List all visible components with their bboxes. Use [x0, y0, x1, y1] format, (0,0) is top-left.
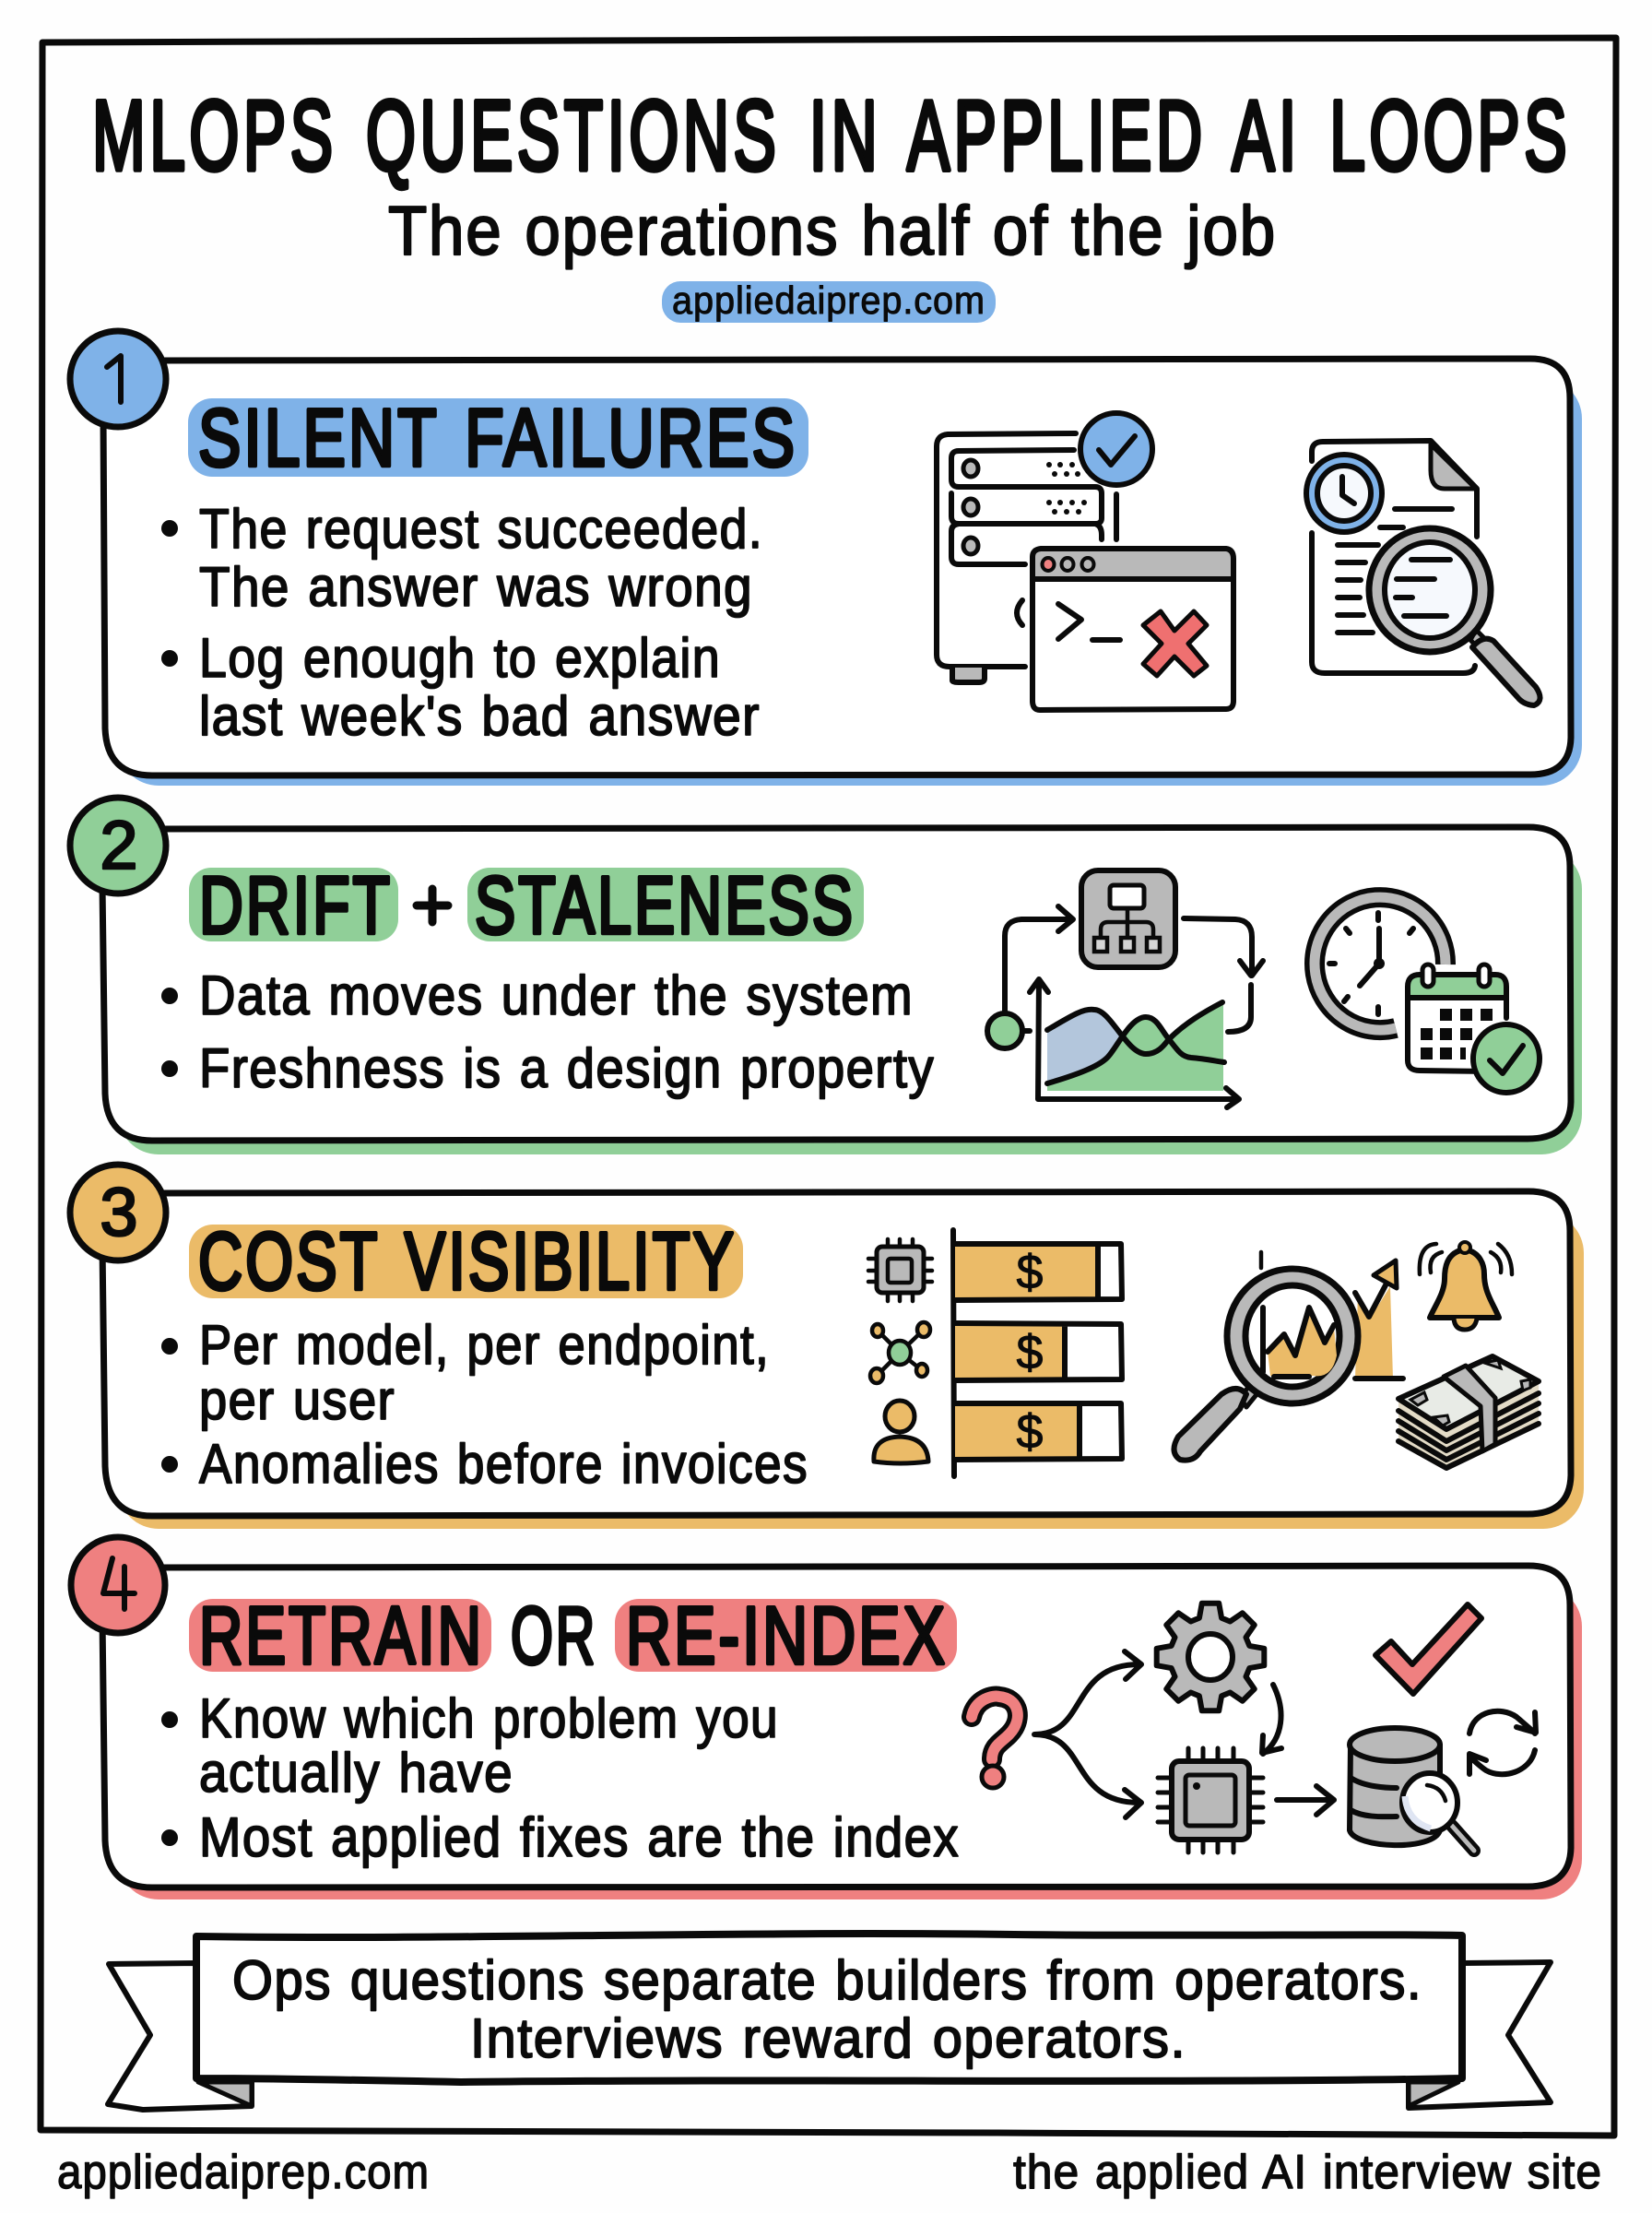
banner message — [232, 1949, 1422, 2069]
heading: STALENESS — [475, 859, 856, 951]
heading — [189, 859, 864, 951]
heading: OR — [511, 1590, 597, 1681]
icon: clock and calendar with check — [1315, 897, 1540, 1093]
bullet list — [161, 964, 935, 1099]
site pill: appliedaiprep.com — [672, 278, 985, 322]
heading: SILENT FAILURES — [198, 392, 797, 483]
bullet list — [161, 1687, 960, 1868]
panel: drift and staleness — [70, 798, 1582, 1154]
icon: per-entity cost bars: $ — [1017, 1246, 1044, 1299]
bullet list: Freshness is a design property — [199, 1037, 935, 1099]
number badge 4 — [71, 1537, 165, 1633]
number badge 3 — [70, 1165, 166, 1260]
footer right: tagline: the applied AI interview site — [1013, 2146, 1602, 2199]
icon: per-entity cost bars: $ — [1017, 1326, 1044, 1379]
banner message: Ops questions separate builders from operators. — [232, 1949, 1422, 2011]
bullet list: Anomalies before invoices — [199, 1433, 808, 1495]
heading — [189, 1590, 957, 1681]
bullet list: Most applied fixes are the index — [199, 1806, 960, 1868]
panel: silent failures — [70, 331, 1582, 786]
panel: retrain or re-index — [71, 1537, 1582, 1899]
icon: magnifier over cost spike with rising arrow — [1174, 1252, 1403, 1461]
icon: question mark branching to fixes — [972, 1604, 1334, 1852]
icon: money stack — [1398, 1356, 1539, 1468]
number badge 1 — [70, 331, 166, 427]
bullet list: per user — [199, 1369, 395, 1431]
icon: per-entity cost bars: $ — [1017, 1405, 1044, 1459]
bullet list: Know which problem you — [199, 1687, 779, 1749]
icon: server and terminal with error — [937, 413, 1233, 710]
banner message: Interviews reward operators. — [470, 2007, 1186, 2069]
number badge 2: 2 — [100, 807, 138, 883]
icon: per-entity cost bars — [868, 1230, 1122, 1476]
panel: cost visibility — [70, 1165, 1584, 1529]
bullet list: The request succeeded. — [199, 498, 763, 560]
bullet list: Log enough to explain — [199, 627, 721, 689]
ribbon tails — [108, 1962, 1551, 2110]
icon: alert bell — [1420, 1242, 1512, 1330]
bullet list: Data moves under the system — [199, 964, 914, 1026]
bullet list — [161, 1314, 808, 1495]
panel card — [102, 1190, 1584, 1529]
heading: RETRAIN — [199, 1590, 484, 1681]
panel card — [102, 1565, 1582, 1899]
footer left: site: appliedaiprep.com — [57, 2146, 430, 2199]
icon: pipeline loop with drift chart — [987, 870, 1263, 1107]
closing ribbon banner — [108, 1934, 1551, 2110]
icon: red check mark — [1375, 1604, 1481, 1694]
panel card — [102, 826, 1582, 1154]
bullet list: actually have — [199, 1742, 513, 1804]
heading: DRIFT — [199, 859, 393, 951]
number badge 3: 3 — [100, 1174, 138, 1250]
panel card — [103, 358, 1582, 786]
icon: database with magnifier and refresh — [1350, 1711, 1536, 1851]
bullet list: The answer was wrong — [199, 556, 753, 618]
ribbon body — [196, 1934, 1462, 2082]
number badge 2 — [70, 798, 166, 893]
heading: COST VISIBILITY — [198, 1215, 737, 1307]
icon: log document with clock and magnifier — [1306, 441, 1540, 705]
bullet list: last week's bad answer — [199, 685, 761, 747]
heading: RE-INDEX — [626, 1590, 948, 1681]
bullet list: Per model, per endpoint, — [199, 1314, 770, 1376]
subtitle: The operations half of the job — [388, 192, 1277, 269]
bullet list — [161, 498, 763, 747]
